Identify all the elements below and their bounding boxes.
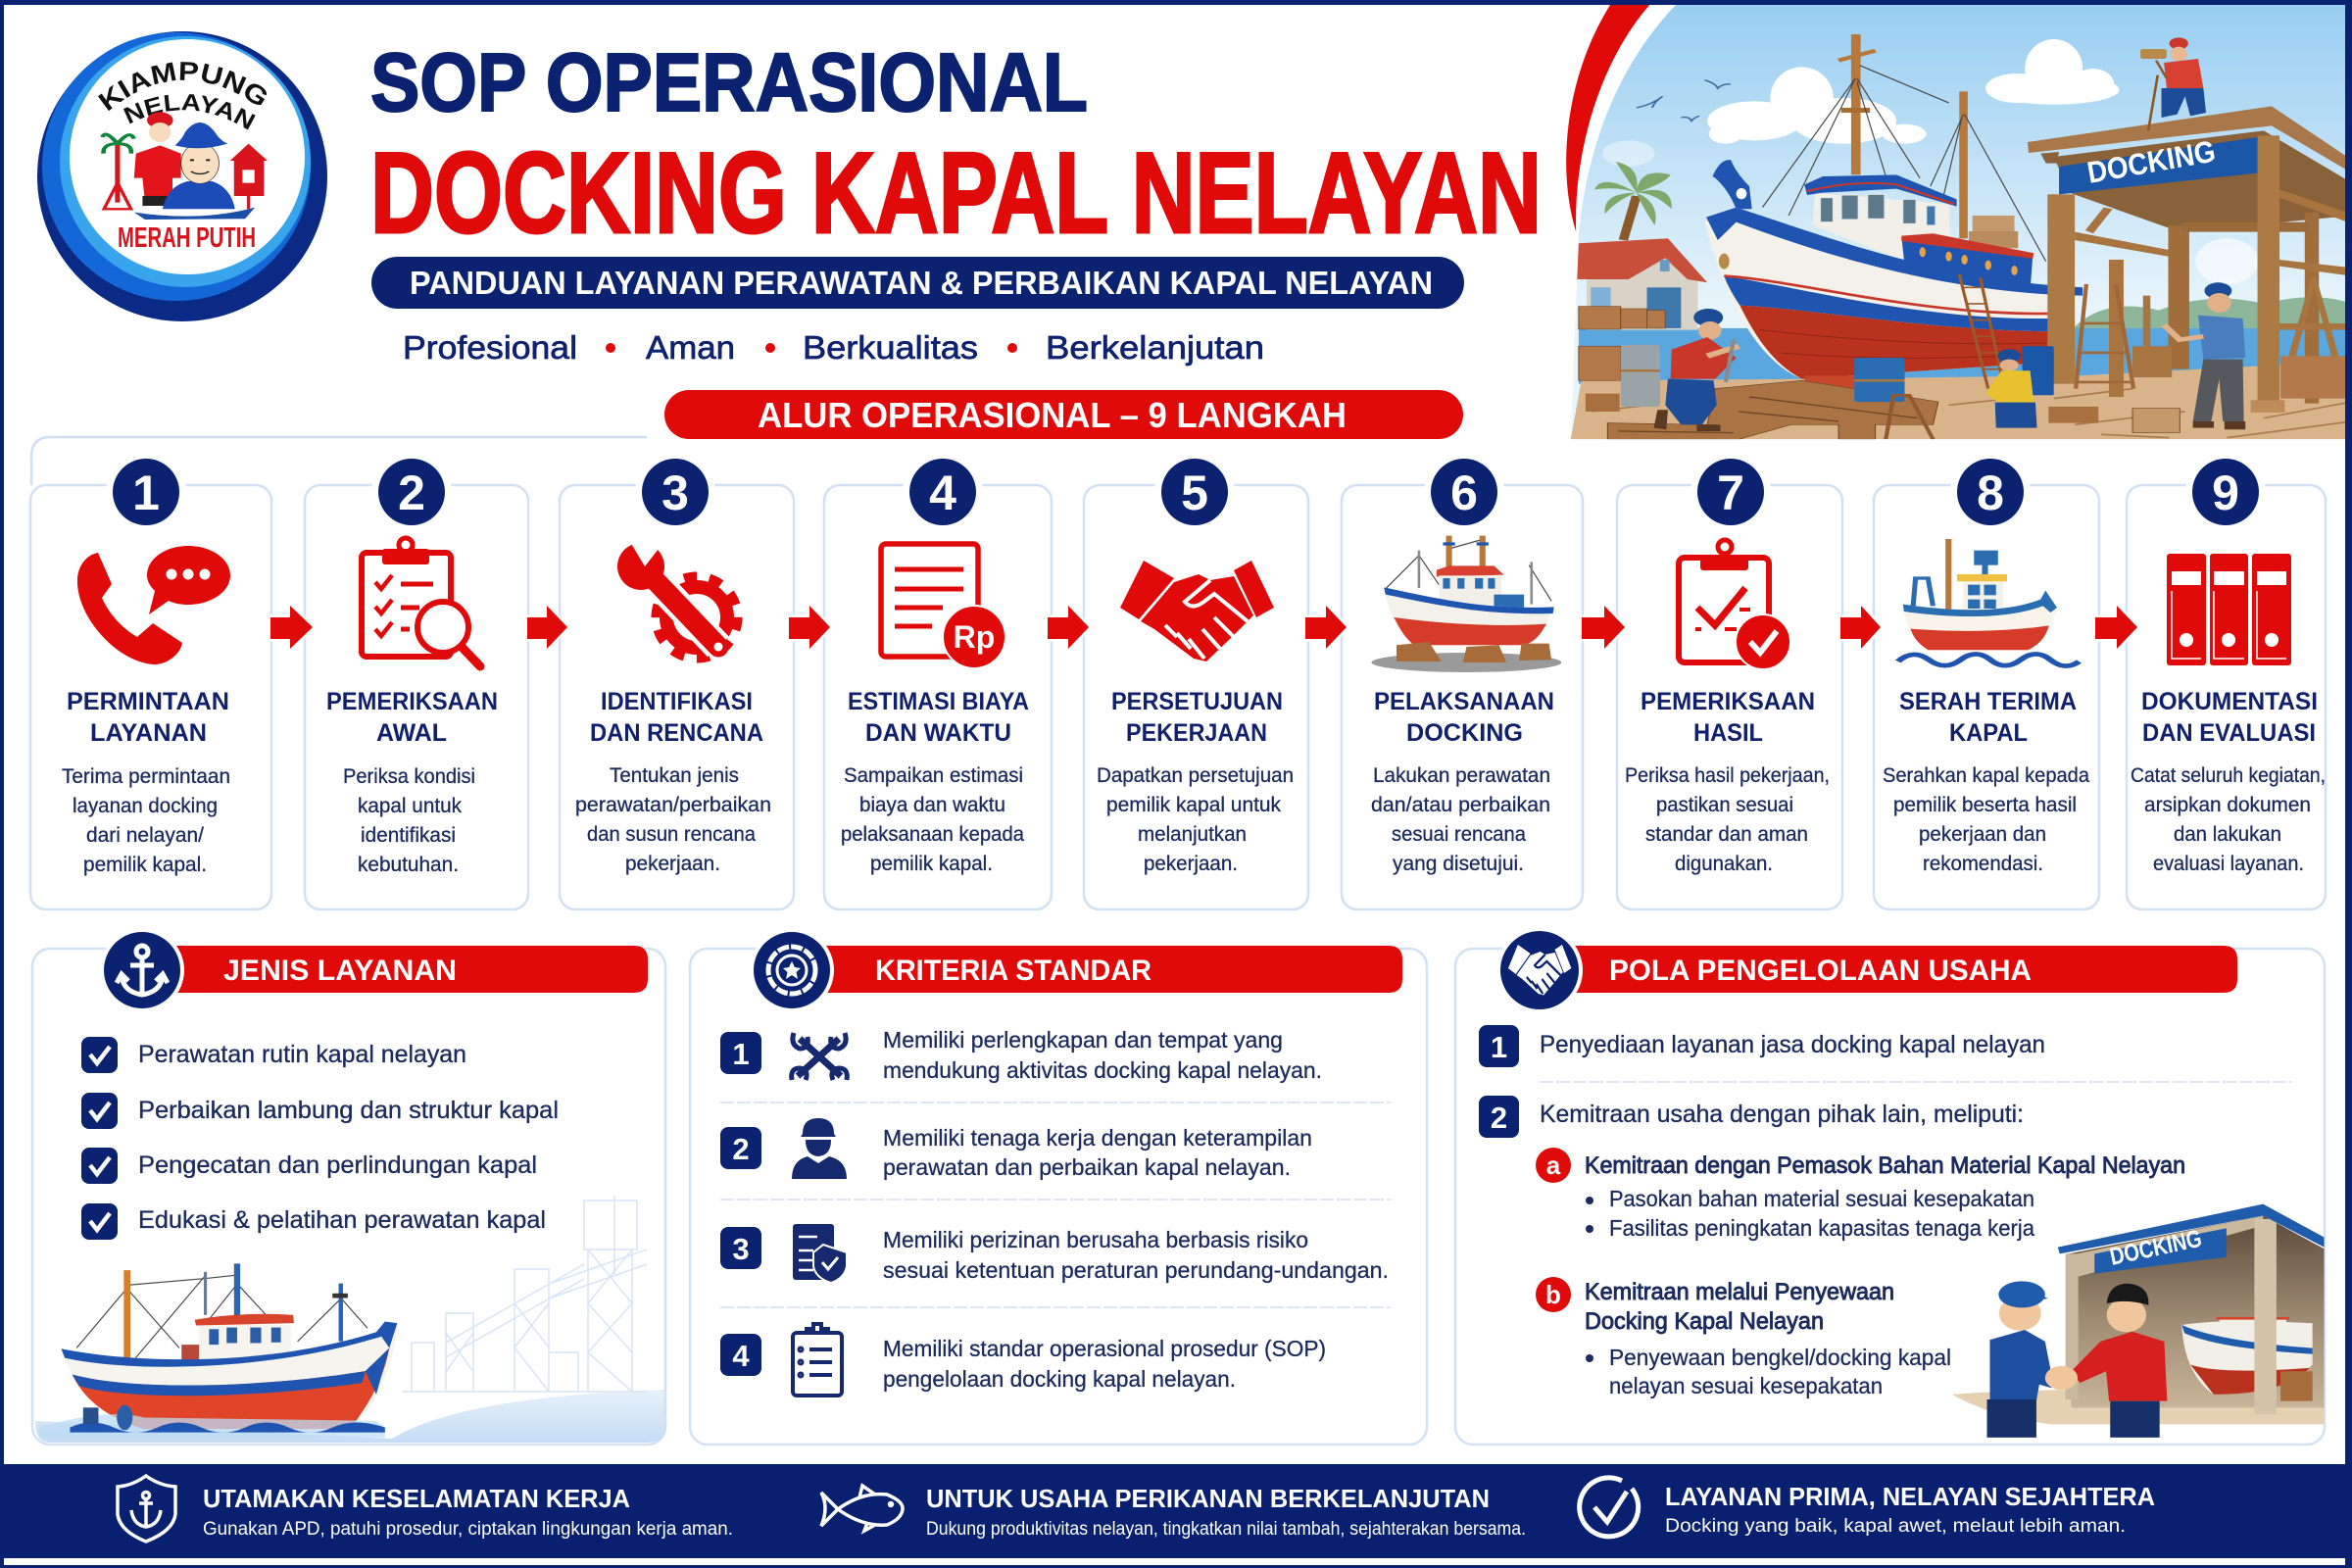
criterion 4 bbox=[720, 1324, 1326, 1396]
step title: PEKERJAAN bbox=[1126, 719, 1267, 747]
criterion 4: Memiliki standar operasional prosedur (SOP) bbox=[883, 1336, 1326, 1361]
step text: dari nelayan/ bbox=[86, 824, 204, 847]
step text: Tentukan jenis bbox=[610, 764, 739, 787]
step text: pastikan sesuai bbox=[1656, 794, 1793, 816]
number 1: 1 bbox=[132, 466, 160, 520]
step title bbox=[1111, 688, 1283, 747]
step 5 card bbox=[1084, 452, 1308, 909]
criterion 3: Memiliki perizinan berusaha berbasis risiko bbox=[883, 1227, 1308, 1252]
step text: digunakan. bbox=[1675, 853, 1773, 875]
worker yellow bbox=[1997, 349, 2021, 363]
step title: AWAL bbox=[376, 719, 447, 747]
partnership b bbox=[1536, 1277, 1951, 1398]
service item 2 bbox=[81, 1093, 559, 1129]
partnership a: Pasokan bahan material sesuai kesepakatan bbox=[1609, 1186, 2034, 1211]
icon: boat on waves bbox=[1898, 539, 2079, 666]
icon: clipboard with check badge bbox=[1679, 540, 1790, 669]
step title: DOKUMENTASI bbox=[2141, 688, 2318, 715]
step title bbox=[1641, 688, 1815, 747]
partnership a bbox=[1536, 1148, 2185, 1241]
section header: jenis layanan: JENIS LAYANAN bbox=[223, 955, 457, 987]
step 9 card bbox=[2127, 452, 2326, 909]
number 9: 9 bbox=[2212, 466, 2239, 520]
number 2 bbox=[371, 452, 452, 532]
step text: Lakukan perawatan bbox=[1373, 764, 1550, 787]
boat bbox=[1712, 160, 1752, 209]
number 6: 6 bbox=[1450, 466, 1478, 520]
alur operasional banner: ALUR OPERASIONAL – 9 LANGKAH bbox=[758, 395, 1347, 435]
step title: HASIL bbox=[1693, 719, 1763, 747]
step title bbox=[67, 688, 229, 747]
icon: ring check bbox=[1580, 1478, 1639, 1537]
red arc accent bbox=[1566, 5, 1649, 232]
service item 4 bbox=[81, 1203, 546, 1240]
partnership b: Penyewaan bengkel/docking kapal bbox=[1609, 1345, 1951, 1370]
footer item: perikanan berkelanjutan bbox=[821, 1484, 1526, 1540]
step title: DOCKING bbox=[1406, 719, 1523, 747]
section header: jenis layanan bbox=[100, 928, 648, 1012]
icon: handshake bbox=[1508, 945, 1571, 996]
step text: yang disetujui. bbox=[1393, 853, 1524, 875]
icon: boat on blocks bbox=[1371, 536, 1561, 672]
number 5: 5 bbox=[1181, 466, 1208, 520]
step text: perawatan/perbaikan bbox=[575, 794, 771, 816]
arrow 7 to 8 bbox=[1840, 606, 1881, 649]
worker kneeling bbox=[1693, 309, 1723, 326]
icon: crossed wrenches bbox=[792, 1033, 847, 1080]
number 3: 3 bbox=[662, 466, 689, 520]
tagline: Berkelanjutan bbox=[1046, 329, 1264, 366]
icon: worker bbox=[792, 1118, 847, 1179]
pola item 2: 2 bbox=[1491, 1101, 1507, 1135]
arrow 2 to 3 bbox=[527, 606, 567, 649]
pola item 1 bbox=[1479, 1025, 2045, 1067]
footer item: keselamatan kerja bbox=[118, 1476, 733, 1542]
step text: pekerjaan dan bbox=[1919, 823, 2046, 846]
logo: Kampung Nelayan Merah Putih: KIAMPUNG bbox=[98, 62, 267, 112]
panel: jenis layanan bbox=[32, 928, 665, 1445]
step text: biaya dan waktu bbox=[859, 794, 1005, 816]
service item 3: Pengecatan dan perlindungan kapal bbox=[138, 1152, 537, 1179]
section header: pola pengelolaan usaha bbox=[1496, 927, 2237, 1013]
service item 1: Perawatan rutin kapal nelayan bbox=[138, 1041, 466, 1068]
step 1 card bbox=[30, 452, 271, 909]
step text: Periksa hasil pekerjaan, bbox=[1625, 764, 1830, 787]
step text: pemilik beserta hasil bbox=[1893, 794, 2077, 816]
partnership a: a bbox=[1546, 1151, 1561, 1180]
panel: kriteria standar bbox=[690, 928, 1427, 1445]
footer item: layanan prima: LAYANAN PRIMA, NELAYAN SEJAHTERA bbox=[1665, 1482, 2155, 1511]
icon: document and shield bbox=[793, 1224, 847, 1283]
icon: wrench and gear bbox=[617, 529, 737, 658]
section header: pola pengelolaan usaha: POLA PENGELOLAAN USAHA bbox=[1609, 955, 2032, 987]
pola item 2: Kemitraan usaha dengan pihak lain, meliputi: bbox=[1540, 1101, 2024, 1128]
logo: Kampung Nelayan Merah Putih: MERAH PUTIH bbox=[118, 222, 256, 254]
subtitle pill bbox=[371, 257, 1464, 309]
criterion 4: 4 bbox=[732, 1339, 750, 1373]
step title: ESTIMASI BIAYA bbox=[848, 688, 1029, 715]
step text: Serahkan kapal kepada bbox=[1883, 764, 2089, 787]
icon: anchor bbox=[117, 946, 168, 995]
step title bbox=[590, 688, 763, 747]
step 3 card bbox=[560, 452, 794, 909]
footer item: keselamatan kerja: UTAMAKAN KESELAMATAN KERJA bbox=[203, 1484, 630, 1513]
criterion 4: pengelolaan docking kapal nelayan. bbox=[883, 1366, 1236, 1392]
step title bbox=[2141, 688, 2318, 747]
step text: layanan docking bbox=[73, 795, 218, 817]
step title: PERSETUJUAN bbox=[1111, 688, 1283, 715]
arrow 8 to 9 bbox=[2095, 606, 2137, 649]
step title bbox=[326, 688, 498, 747]
criterion 2: perawatan dan perbaikan kapal nelayan. bbox=[883, 1154, 1291, 1180]
right man bbox=[2107, 1298, 2146, 1332]
step text: melanjutkan bbox=[1138, 823, 1247, 846]
step text bbox=[841, 764, 1024, 875]
criterion 3: sesuai ketentuan peraturan perundang-undangan. bbox=[883, 1257, 1389, 1283]
step text bbox=[2131, 764, 2326, 875]
step text: Periksa kondisi bbox=[343, 765, 475, 788]
title: SOP Operasional: SOP OPERASIONAL bbox=[370, 36, 1088, 128]
step text: Catat seluruh kegiatan, bbox=[2131, 764, 2326, 787]
arrow 5 to 6 bbox=[1305, 606, 1347, 649]
service item 4: Edukasi & pelatihan perawatan kapal bbox=[138, 1206, 546, 1234]
service item 3 bbox=[81, 1148, 537, 1184]
icon: handshake bbox=[1120, 561, 1274, 662]
step text: pelaksanaan kepada bbox=[841, 823, 1024, 846]
footer item: perikanan berkelanjutan: Dukung produktivitas nelayan, tingkatkan nilai tambah, sejahterakan bersama. bbox=[926, 1519, 1526, 1540]
step text: identifikasi bbox=[361, 824, 456, 847]
criterion 2 bbox=[720, 1118, 1312, 1180]
step 4 card bbox=[824, 452, 1052, 909]
tagline: Aman bbox=[646, 329, 735, 366]
step title: PEMERIKSAAN bbox=[326, 688, 498, 715]
step 8 card bbox=[1874, 452, 2099, 909]
number 6 bbox=[1424, 452, 1504, 532]
step 6 card bbox=[1342, 452, 1583, 909]
pola item 1: Penyediaan layanan jasa docking kapal nelayan bbox=[1540, 1031, 2045, 1058]
criterion 1: 1 bbox=[732, 1037, 750, 1071]
icon: star badge bbox=[768, 947, 815, 994]
tagline bbox=[403, 329, 1264, 366]
section header: kriteria standar: KRITERIA STANDAR bbox=[875, 955, 1152, 987]
number 3 bbox=[635, 452, 715, 532]
number 9 bbox=[2185, 452, 2266, 532]
partnership b: nelayan sesuai kesepakatan bbox=[1609, 1373, 1883, 1398]
step text bbox=[1097, 764, 1294, 875]
criterion 3: 3 bbox=[732, 1232, 750, 1266]
number 5 bbox=[1154, 452, 1235, 532]
hero illustration: boat in dock bbox=[1560, 0, 2352, 441]
footer item: layanan prima bbox=[1580, 1478, 2155, 1537]
left man bbox=[1999, 1297, 2041, 1331]
icon: clipboard with magnifier bbox=[362, 538, 480, 666]
step title: DAN RENCANA bbox=[590, 719, 763, 747]
alur operasional banner bbox=[664, 390, 1463, 439]
panel: pola pengelolaan usaha bbox=[1455, 927, 2325, 1445]
partnership a: Fasilitas peningkatan kapasitas tenaga kerja bbox=[1609, 1215, 2034, 1241]
footer band bbox=[0, 1464, 2352, 1558]
step title: DAN WAKTU bbox=[865, 719, 1011, 747]
step text: evaluasi layanan. bbox=[2153, 853, 2304, 875]
step text bbox=[343, 765, 475, 876]
number 8: 8 bbox=[1977, 466, 2004, 520]
hero sign text: DOCKING bbox=[2084, 134, 2218, 190]
step text: Dapatkan persetujuan bbox=[1097, 764, 1294, 787]
step text: Sampaikan estimasi bbox=[844, 764, 1023, 787]
icon: cost document with Rp coin: Rp bbox=[954, 619, 995, 655]
criterion 2: Memiliki tenaga kerja dengan keterampilan bbox=[883, 1125, 1312, 1151]
step text: dan lakukan bbox=[2174, 823, 2281, 846]
boat illustration bbox=[39, 1263, 397, 1438]
number 1 bbox=[106, 452, 186, 532]
service item 1 bbox=[81, 1037, 466, 1073]
icon: fish bbox=[821, 1486, 903, 1531]
criterion 1: mendukung aktivitas docking kapal nelayan. bbox=[883, 1057, 1322, 1083]
step text: Terima permintaan bbox=[62, 765, 230, 788]
ground items bbox=[1607, 380, 1938, 439]
step text bbox=[575, 764, 771, 875]
subtitle pill: PANDUAN LAYANAN PERAWATAN & PERBAIKAN KAPAL NELAYAN bbox=[410, 265, 1433, 301]
tagline: Profesional bbox=[403, 329, 577, 366]
step title bbox=[1899, 688, 2077, 747]
partnership b: b bbox=[1545, 1280, 1561, 1309]
step title: SERAH TERIMA bbox=[1899, 688, 2077, 715]
logo: Kampung Nelayan Merah Putih bbox=[37, 31, 327, 321]
step title: IDENTIFIKASI bbox=[601, 688, 753, 715]
criterion 1 bbox=[720, 1027, 1322, 1083]
icon: cost document with Rp coin bbox=[881, 544, 1005, 668]
step text: standar dan aman bbox=[1645, 823, 1808, 846]
step text bbox=[1883, 764, 2089, 875]
step title: PERMINTAAN bbox=[67, 688, 229, 715]
number 7: 7 bbox=[1717, 466, 1744, 520]
icon: clipboard list bbox=[793, 1324, 842, 1396]
logo: Kampung Nelayan Merah Putih: NELAYAN bbox=[123, 94, 256, 129]
footer item: keselamatan kerja: Gunakan APD, patuhi prosedur, ciptakan lingkungan kerja aman. bbox=[203, 1519, 733, 1540]
step title: LAYANAN bbox=[90, 719, 207, 747]
pola item 2 bbox=[1479, 1096, 2024, 1138]
ghost dock illustration bbox=[35, 1196, 665, 1443]
icon: shield with anchor bbox=[118, 1476, 175, 1542]
step text bbox=[62, 765, 230, 876]
step title: PELAKSANAAN bbox=[1374, 688, 1554, 715]
footer item: layanan prima: Docking yang baik, kapal awet, melaut lebih aman. bbox=[1665, 1516, 2126, 1537]
worker on roof bbox=[2170, 37, 2188, 49]
number 4 bbox=[903, 452, 983, 532]
worker standing bbox=[2204, 282, 2231, 299]
service item 2: Perbaikan lambung dan struktur kapal bbox=[138, 1097, 559, 1124]
shed bbox=[2054, 130, 2352, 232]
step text: rekomendasi. bbox=[1923, 853, 2043, 875]
illustration sign text: DOCKING bbox=[2107, 1225, 2204, 1271]
step text: pekerjaan. bbox=[625, 853, 720, 875]
step text: arsipkan dokumen bbox=[2144, 794, 2311, 816]
step 7 card bbox=[1617, 452, 1842, 909]
step text: dan/atau perbaikan bbox=[1371, 794, 1550, 816]
criterion 2: 2 bbox=[732, 1132, 750, 1166]
title: Docking Kapal Nelayan: DOCKING KAPAL NELAYAN bbox=[370, 128, 1542, 257]
section header: kriteria standar bbox=[750, 928, 1402, 1012]
step text bbox=[1371, 764, 1550, 875]
step text: pemilik kapal untuk bbox=[1106, 794, 1281, 816]
criterion 3 bbox=[720, 1224, 1389, 1283]
illustration: docking shed with handshake bbox=[1952, 1204, 2325, 1438]
flow container outline bbox=[31, 437, 647, 485]
number 2: 2 bbox=[398, 466, 425, 520]
number 7 bbox=[1690, 452, 1771, 532]
step text: kapal untuk bbox=[358, 795, 462, 817]
pola item 1: 1 bbox=[1491, 1030, 1507, 1064]
step title: DAN EVALUASI bbox=[2142, 719, 2316, 747]
arrow 3 to 4 bbox=[789, 606, 830, 649]
step title bbox=[1374, 688, 1554, 747]
tagline: Berkualitas bbox=[803, 329, 978, 366]
step text: sesuai rencana bbox=[1392, 823, 1526, 846]
icon: binders bbox=[2167, 554, 2291, 665]
arrow 6 to 7 bbox=[1582, 606, 1625, 649]
number 4: 4 bbox=[929, 466, 956, 520]
arrow 4 to 5 bbox=[1048, 606, 1089, 649]
criterion 1: Memiliki perlengkapan dan tempat yang bbox=[883, 1027, 1283, 1053]
step text: pemilik kapal. bbox=[83, 854, 207, 876]
step text bbox=[1625, 764, 1830, 875]
step title bbox=[848, 688, 1029, 747]
footer item: perikanan berkelanjutan: UNTUK USAHA PERIKANAN BERKELANJUTAN bbox=[926, 1484, 1490, 1513]
partnership b: Docking Kapal Nelayan bbox=[1585, 1308, 1824, 1335]
step text: dan susun rencana bbox=[587, 823, 756, 846]
step text: kebutuhan. bbox=[358, 854, 459, 876]
partnership a: Kemitraan dengan Pemasok Bahan Material Kapal Nelayan bbox=[1585, 1152, 2185, 1179]
step text: pekerjaan. bbox=[1144, 853, 1238, 875]
step text: pemilik kapal. bbox=[870, 853, 993, 875]
partnership b: Kemitraan melalui Penyewaan bbox=[1585, 1279, 1894, 1305]
step 2 card bbox=[305, 452, 528, 909]
step title: KAPAL bbox=[1949, 719, 2028, 747]
number 8 bbox=[1950, 452, 2031, 532]
arrow 1 to 2 bbox=[270, 606, 313, 649]
step title: PEMERIKSAAN bbox=[1641, 688, 1815, 715]
icon: phone and chat bubble bbox=[77, 546, 230, 664]
